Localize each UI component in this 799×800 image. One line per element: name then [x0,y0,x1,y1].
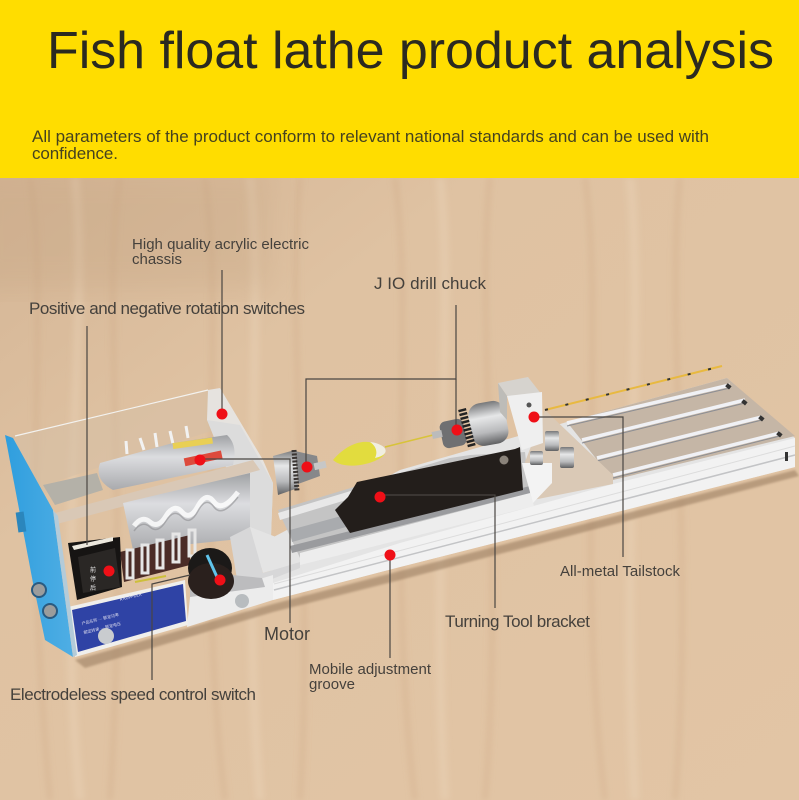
subtitle text: All parameters of the product conform to relevant national standards and can be used with [32,127,709,146]
speed knob [188,548,234,599]
line: rotation switch [86,326,88,545]
label: motor: Motor [264,624,310,644]
subtitle text: confidence. [32,144,118,163]
label: chassis: High quality acrylic electric [132,236,310,253]
float [333,442,385,466]
workpiece rod [333,366,722,466]
black turning tool bracket [335,447,523,533]
label: chassis: chassis [132,251,182,268]
rails beneath bracket [278,452,530,558]
line: drill chuck bracket [306,305,456,467]
label: tailstock: All-metal Tailstock [560,563,680,580]
title: Fish float lathe product analysis [47,22,774,80]
bolt [235,594,249,608]
acrylic rear panel [13,388,273,573]
line: tailstock [534,417,623,557]
line: groove [389,556,391,658]
aluminium rail base [268,378,795,600]
line: motor [200,459,290,623]
blue nameplate: 额定转速 ··· 额定电压 [83,620,121,635]
black rocker switch [68,537,122,600]
blue nameplate: 产品名称 ··· 额定功率 [81,611,119,626]
acrylic top strip [55,460,260,524]
background: wood table [0,170,799,800]
motor mount [230,527,300,585]
black rocker switch: 停 [90,575,96,583]
label: groove [309,661,432,693]
triangular bracket plate [525,410,613,500]
leader lines [87,270,623,680]
line: chassis [221,270,223,412]
label: drill chuck: J IO drill chuck [374,274,486,293]
red marker dots [104,408,540,586]
terminal pins [126,426,188,454]
black rocker switch: 前 [90,566,96,574]
label: tool bracket: Turning Tool bracket [445,612,590,631]
label: speed control switch: Electrodeless speed control switch [10,685,256,704]
table shadow [75,470,799,668]
tailstock [498,377,574,503]
lathe illustration [5,366,799,668]
label: groove: Mobile adjustment [309,661,432,678]
blue end plate [5,435,77,657]
line: tool bracket [380,495,495,608]
subtitle text [32,127,709,163]
left chuck [273,450,327,495]
line: speed switch [152,575,190,680]
wires and heat sink pins [120,530,195,582]
rear motor cylinder [43,435,235,505]
front motor cylinder [123,473,250,550]
blue nameplate [68,580,188,657]
label: groove: groove [309,676,355,693]
right chuck [431,399,510,449]
black rocker switch: 后 [90,584,96,592]
label: rotation switches: Positive and negative rotation switches [29,299,305,318]
blue nameplate: A KUPPDLA [119,592,142,602]
front base plate [187,575,273,627]
header: yellow banner [0,0,799,178]
label: chassis [132,236,310,268]
